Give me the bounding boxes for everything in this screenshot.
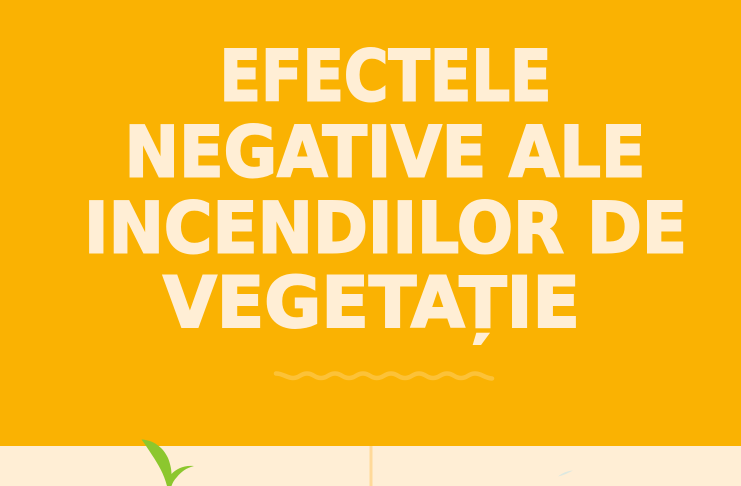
title: INCENDIILOR DE (84, 188, 687, 270)
title: VEGETAȚIE (163, 262, 580, 344)
panel divider (370, 446, 372, 486)
title: NEGATIVE ALE (124, 112, 646, 194)
title: EFECTELE (220, 36, 552, 118)
lower panel (0, 446, 741, 486)
icon: green sprout (142, 440, 194, 486)
icon: faint leaf tip (558, 470, 573, 476)
wavy underline (276, 374, 492, 378)
title (84, 36, 687, 344)
